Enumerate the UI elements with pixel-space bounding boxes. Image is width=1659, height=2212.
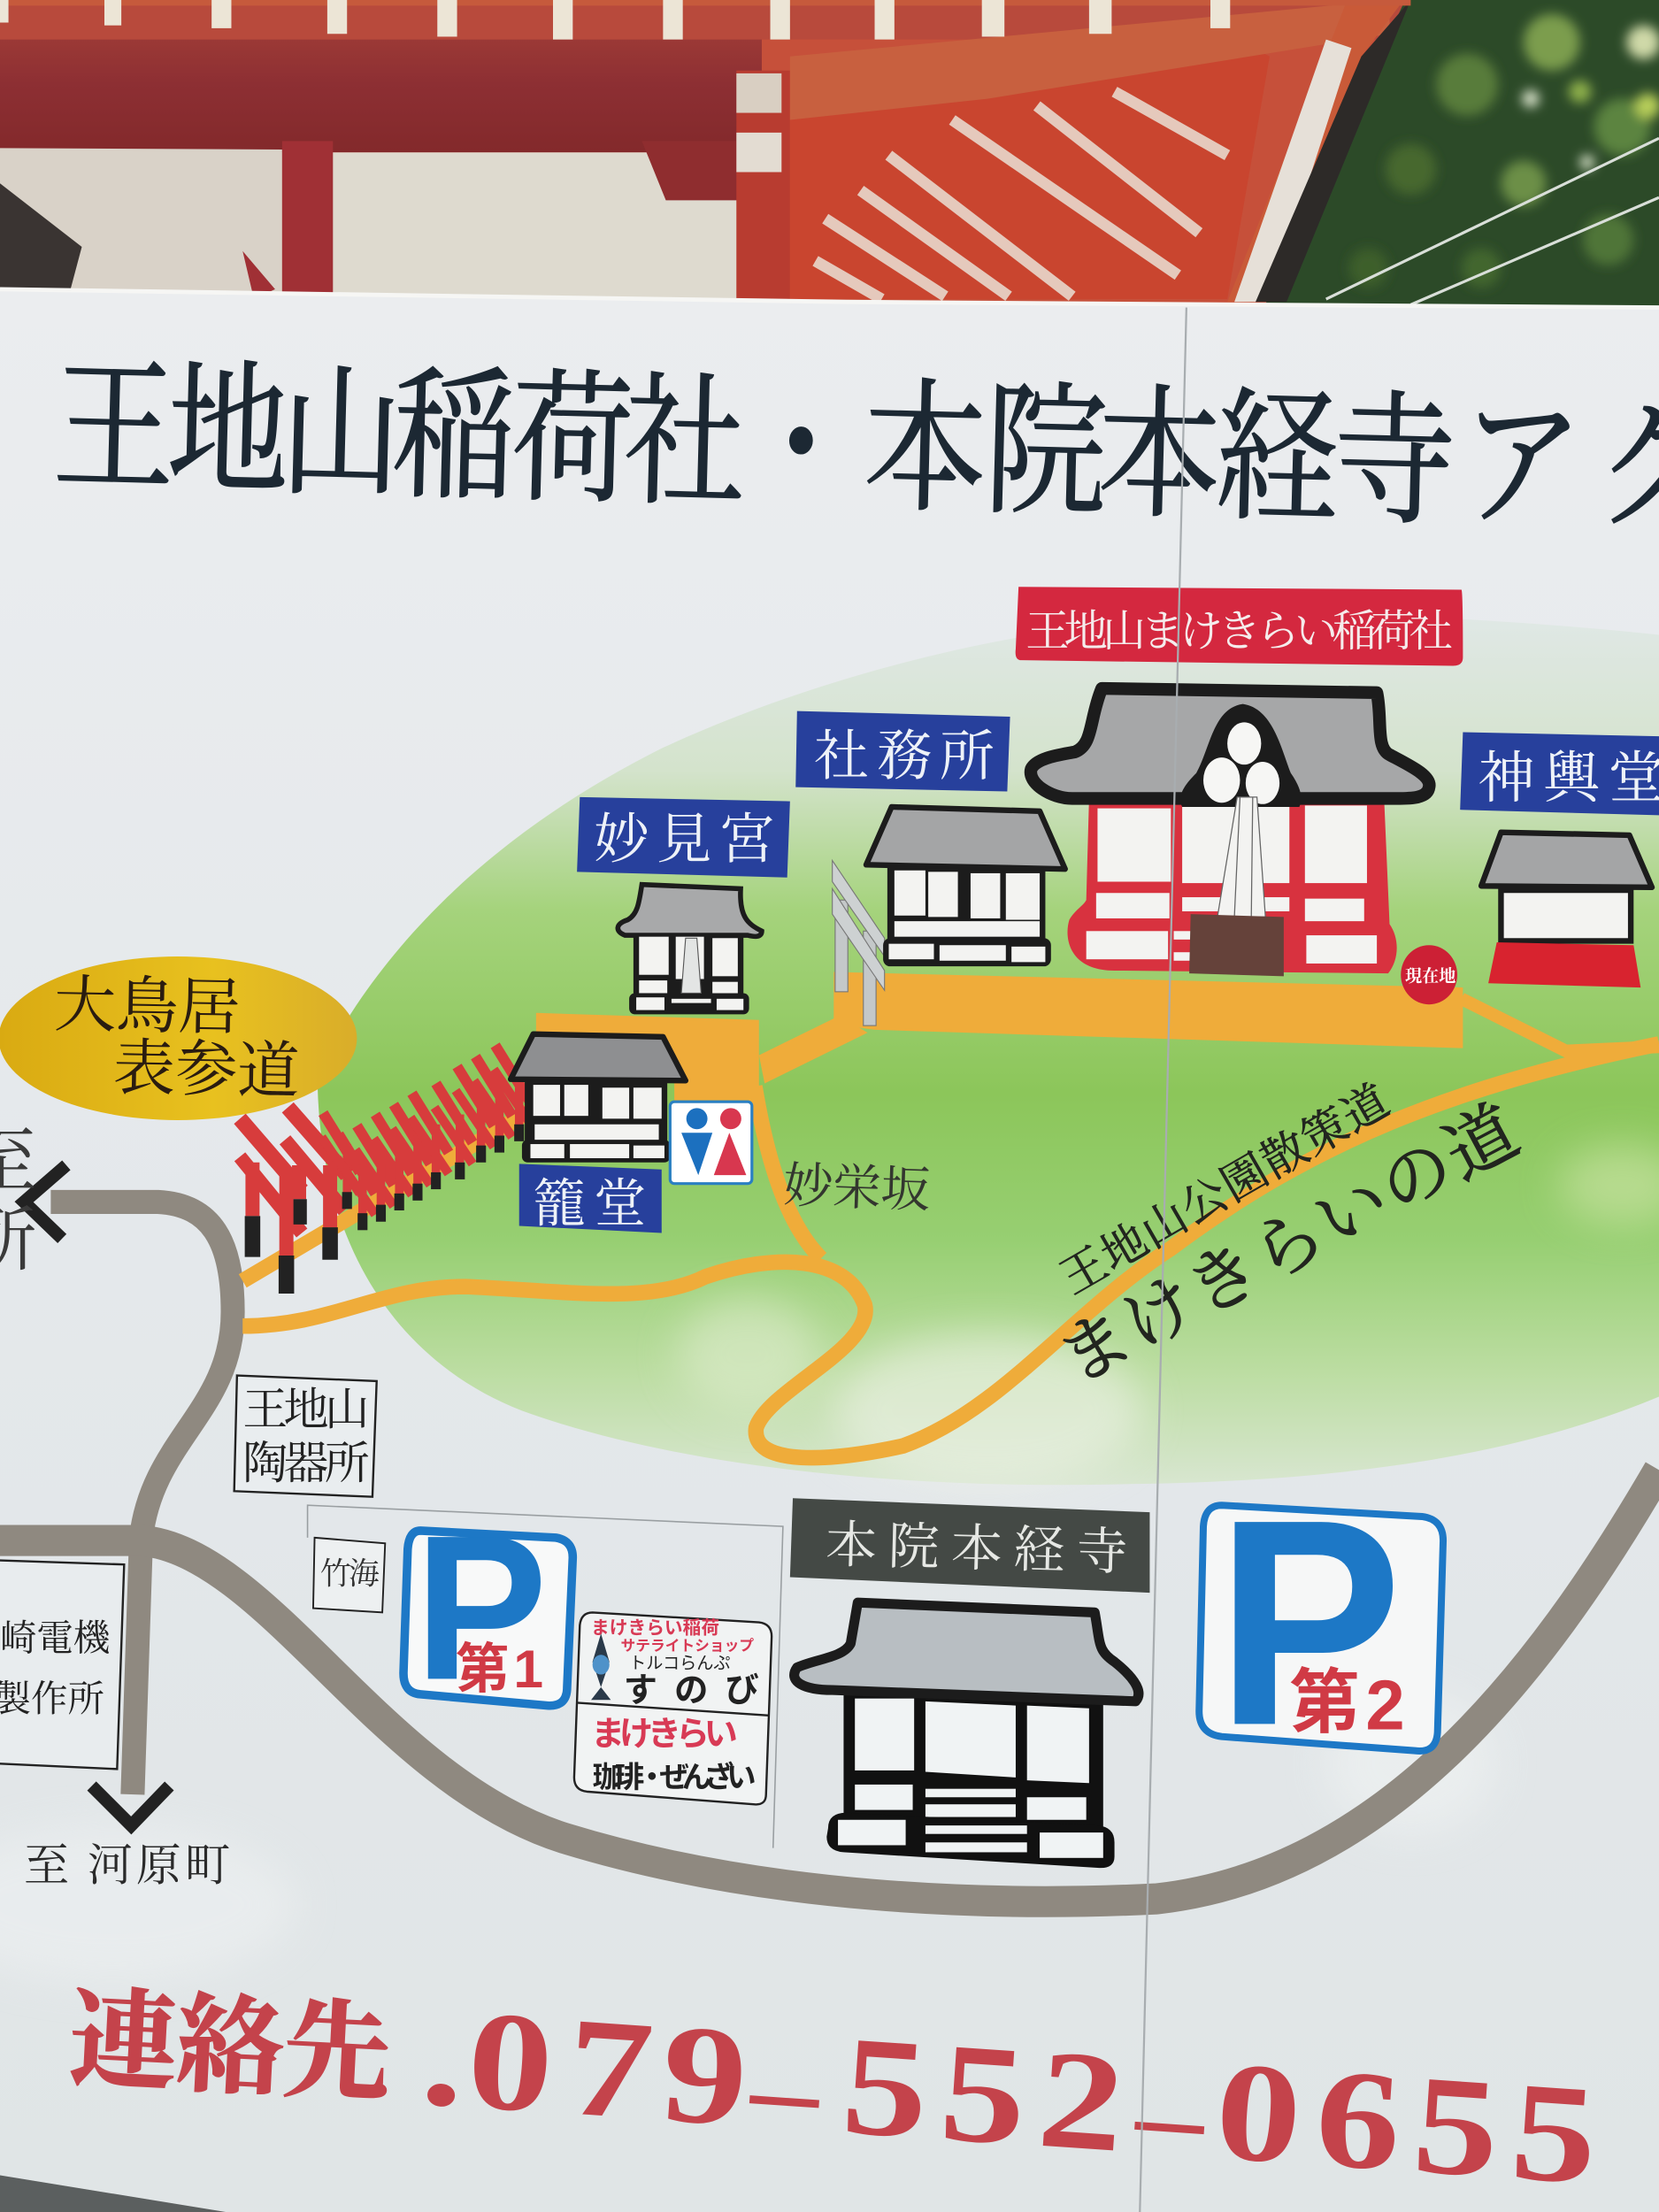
building: 神輿堂 (1481, 833, 1652, 987)
shrine: brown door (1189, 914, 1284, 976)
panel: parking and shop (308, 1493, 783, 1848)
torii gate row (240, 1045, 532, 1294)
green hill (318, 614, 1659, 1485)
sign: 第1 parking: P (415, 1493, 548, 1723)
box: shop すのび: まけきらい稲荷 (591, 1617, 719, 1638)
label: 大鳥居 表参道 (0, 956, 357, 1120)
sign: 第2 parking: P (1216, 1459, 1402, 1786)
sign: 第2 parking: 2 (1365, 1666, 1405, 1745)
box: 竹海 (313, 1538, 385, 1612)
path: lower plaza (536, 1013, 759, 1101)
gate: grey torii (833, 861, 885, 1025)
panel seam (1140, 308, 1187, 2212)
sign: 第1 parking: 1 (513, 1639, 543, 1699)
contact: number: 0655 (1211, 2032, 1601, 2212)
icon: turkish lamp (591, 1633, 611, 1700)
temple: base (826, 1813, 1115, 1868)
label: 大鳥居 表参道: 大鳥居 (53, 971, 241, 1043)
label: 妙見宮: 妙見宮 (594, 810, 774, 870)
walking routes (242, 999, 1659, 1458)
label: 妙見宮 (577, 797, 790, 878)
contact phone (66, 1978, 1601, 2212)
sign: 第1 parking: 第 (456, 1639, 510, 1699)
marker: 現在地 (1401, 945, 1457, 1004)
box: shop すのび (574, 1612, 772, 1804)
sign: toilets (670, 1102, 752, 1184)
sign: 第2 parking: 第 (1289, 1663, 1360, 1742)
label: 王地山まけきらい稲荷社: 王地山まけきらい稲荷社 (1025, 607, 1453, 656)
box: shop すのび: トルコらんぷ (629, 1655, 730, 1673)
label: 本院本経寺: 本院本経寺 (825, 1517, 1128, 1581)
torii: first large gate (240, 1118, 302, 1257)
box: shop すのび: まけきらい (591, 1715, 738, 1753)
box: 王地山陶器所: 王地山 (242, 1386, 370, 1435)
text: 王地山公園散策道: 王地山公園散策道 (1053, 1077, 1397, 1304)
text: 至 河原町: 至 河原町 (24, 1841, 230, 1891)
background: red temple eaves (0, 0, 1659, 325)
box: 竹海: 竹海 (320, 1556, 380, 1591)
label: 社務所 (795, 711, 1010, 791)
orange paths (536, 972, 1463, 1101)
contact: label: 連絡先 (66, 1980, 394, 2116)
label: 籠堂: 堂 (594, 1175, 646, 1233)
label: 本院本経寺 (790, 1498, 1149, 1593)
road: to the north-west (50, 1202, 233, 1794)
box: shop すのび: すのび (624, 1671, 759, 1709)
grey roads (0, 1202, 1659, 1901)
shrine: red body (1068, 795, 1397, 973)
arrow: down (92, 1786, 169, 1825)
arrow: left (24, 1165, 66, 1239)
contact: number: – (1131, 2052, 1210, 2181)
building: 社務所 (866, 807, 1065, 966)
label: 大鳥居 表参道: 表参道 (112, 1034, 300, 1107)
ground strip (0, 2176, 226, 2212)
box: 王地山陶器所 (234, 1376, 377, 1497)
path: upper plaza (833, 972, 1463, 1048)
marker: 現在地: 現在地 (1405, 967, 1455, 987)
contact: number: – (746, 2025, 825, 2155)
shrine: roof (1031, 688, 1429, 798)
path: link between plazas (759, 1016, 868, 1083)
label: 籠堂: 籠 (534, 1175, 586, 1233)
temple: roof (795, 1602, 1139, 1701)
box: shop すのび: サテライトショップ (621, 1637, 754, 1654)
temple: black frame (843, 1693, 1103, 1828)
torii: second large gate (285, 1108, 347, 1294)
shrine: central gable (1180, 704, 1302, 807)
box: 岩崎電機製作所 (0, 1560, 124, 1769)
contact: number: 552 (838, 2007, 1129, 2182)
box: 王地山陶器所: 陶器所 (242, 1440, 370, 1489)
background: trees (1256, 0, 1659, 311)
label: 社務所: 社務所 (814, 726, 995, 787)
contact: number (418, 1978, 1601, 2212)
label: 籠堂 (519, 1164, 662, 1233)
building: 籠堂 (511, 1034, 686, 1163)
text: まけきらいの道: まけきらいの道 (1046, 1092, 1531, 1400)
box: shop すのび: 珈琲・ぜんざい (593, 1761, 757, 1794)
contact: number: .079 (418, 1978, 752, 2156)
text: 妙栄坂: 妙栄坂 (782, 1158, 931, 1218)
shrine: rope (1217, 797, 1265, 917)
label: 神輿堂 (1460, 732, 1659, 816)
building: 本院本経寺 (795, 1602, 1139, 1868)
building: 妙見宮 (618, 885, 762, 1014)
label: 王地山まけきらい稲荷社 (1016, 587, 1463, 666)
road: valley curve (0, 1470, 1659, 1901)
glare patches (0, 1146, 1659, 1982)
building: main shrine (1031, 688, 1429, 976)
